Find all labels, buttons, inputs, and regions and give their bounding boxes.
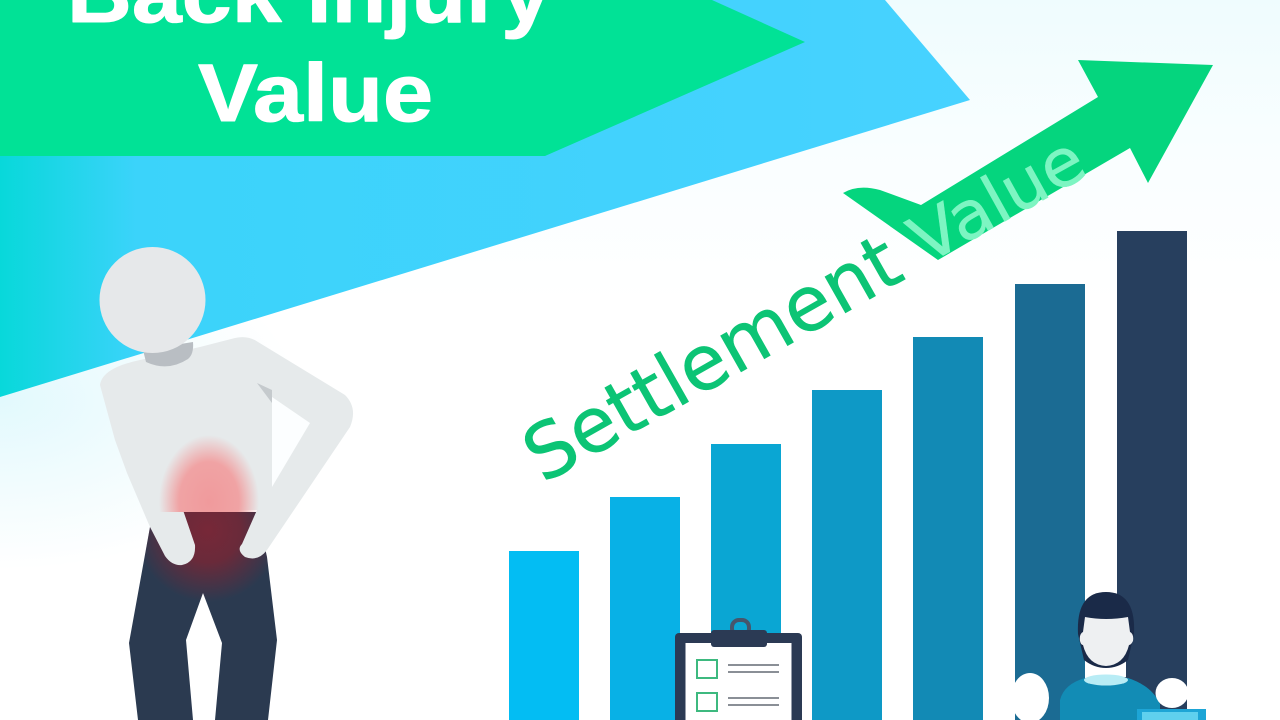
legs [129, 512, 277, 720]
pain glow on hips [146, 512, 268, 597]
icon: clipboard [675, 620, 802, 720]
rotated label: Settlement: Settlement [508, 216, 916, 500]
armpit fold [257, 383, 272, 403]
neck shadow [143, 342, 193, 366]
pain glow on back [162, 438, 256, 512]
growth arrow [843, 60, 1213, 260]
title [67, 0, 551, 139]
cyan banner [0, 0, 970, 397]
icon: advisor figure [1011, 592, 1206, 720]
figure: injured person [100, 247, 353, 720]
bar chart [509, 231, 1187, 720]
title: Value [198, 48, 433, 139]
torso and arms [100, 337, 353, 565]
head [100, 247, 206, 353]
rotated label: Value: Value [896, 121, 1098, 279]
green title banner [0, 0, 805, 156]
arm gap [272, 397, 310, 487]
